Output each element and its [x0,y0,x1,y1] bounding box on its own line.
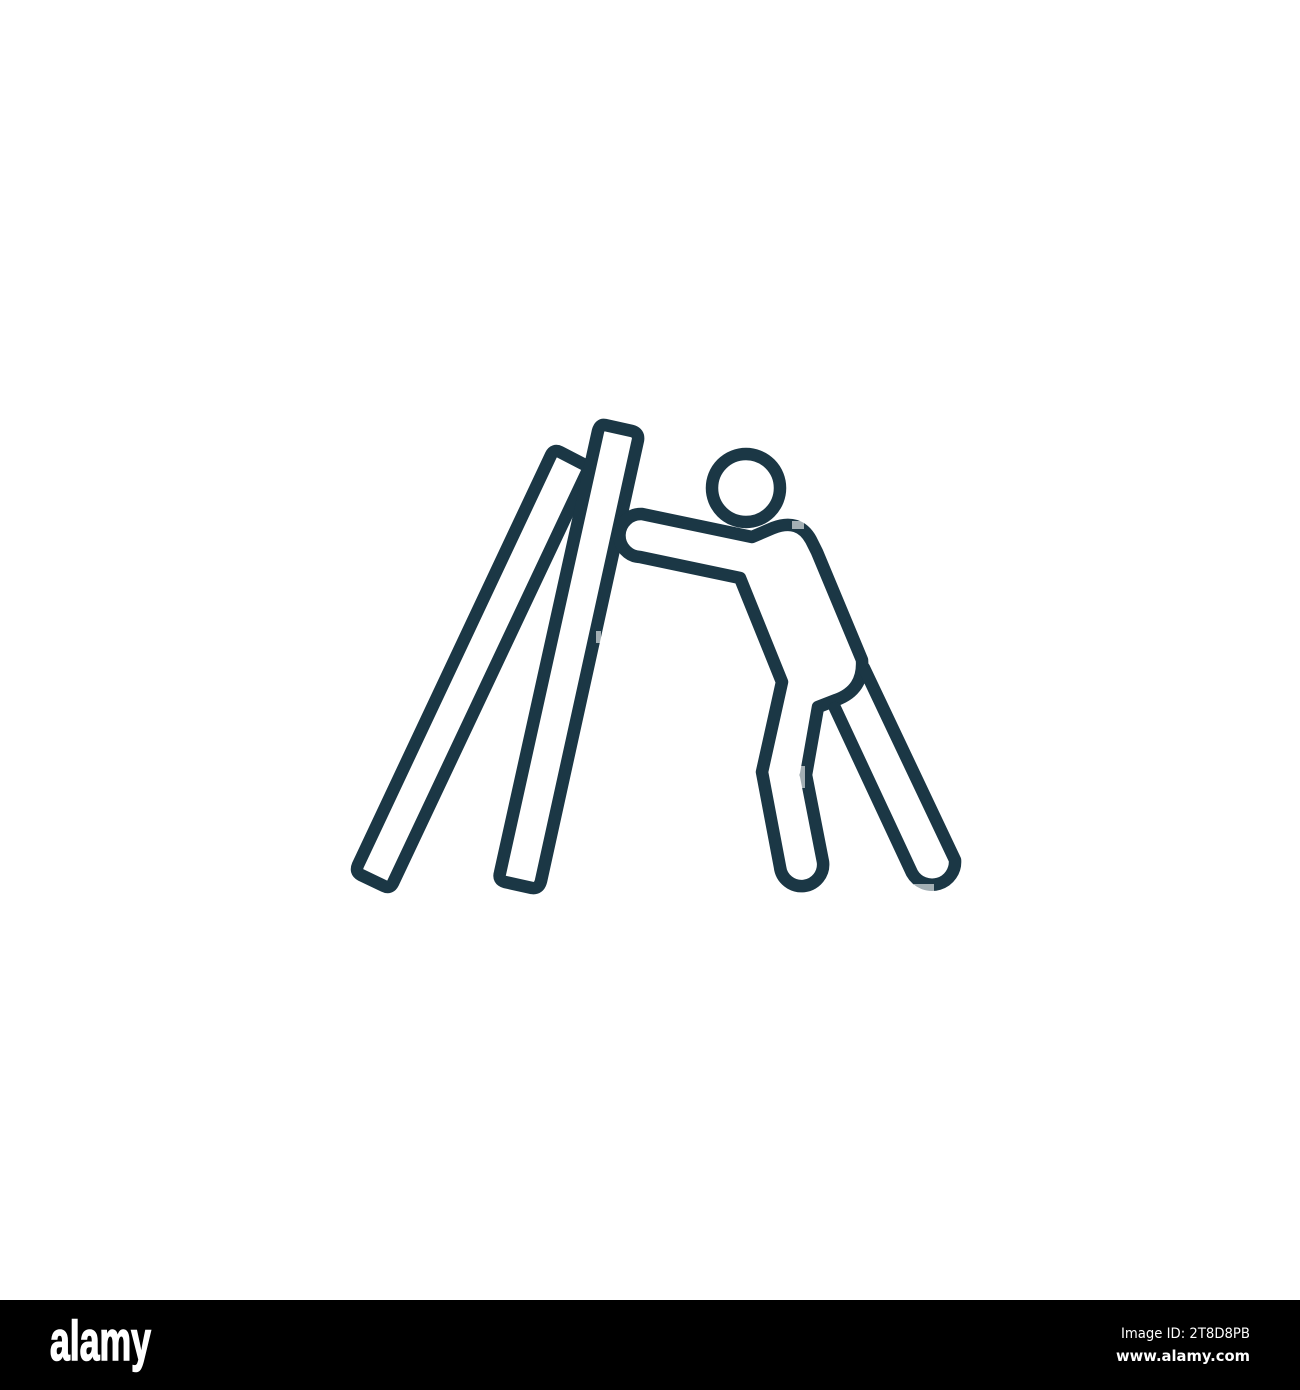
footer bar [0,1300,1300,1390]
icon: back leg [835,668,955,885]
icon: back plank [357,451,587,887]
icon: front plank [500,425,638,888]
watermark specks on icon [596,521,934,893]
icon: person head [712,454,780,522]
icon: person pushing against leaning planks [357,425,955,888]
image ID: Image ID: 2T8D8PB [1121,1326,1250,1342]
website url: www.alamy.com [1116,1347,1250,1365]
logo: alamy: alamy [50,1309,151,1372]
icon: person body and legs [619,514,862,886]
